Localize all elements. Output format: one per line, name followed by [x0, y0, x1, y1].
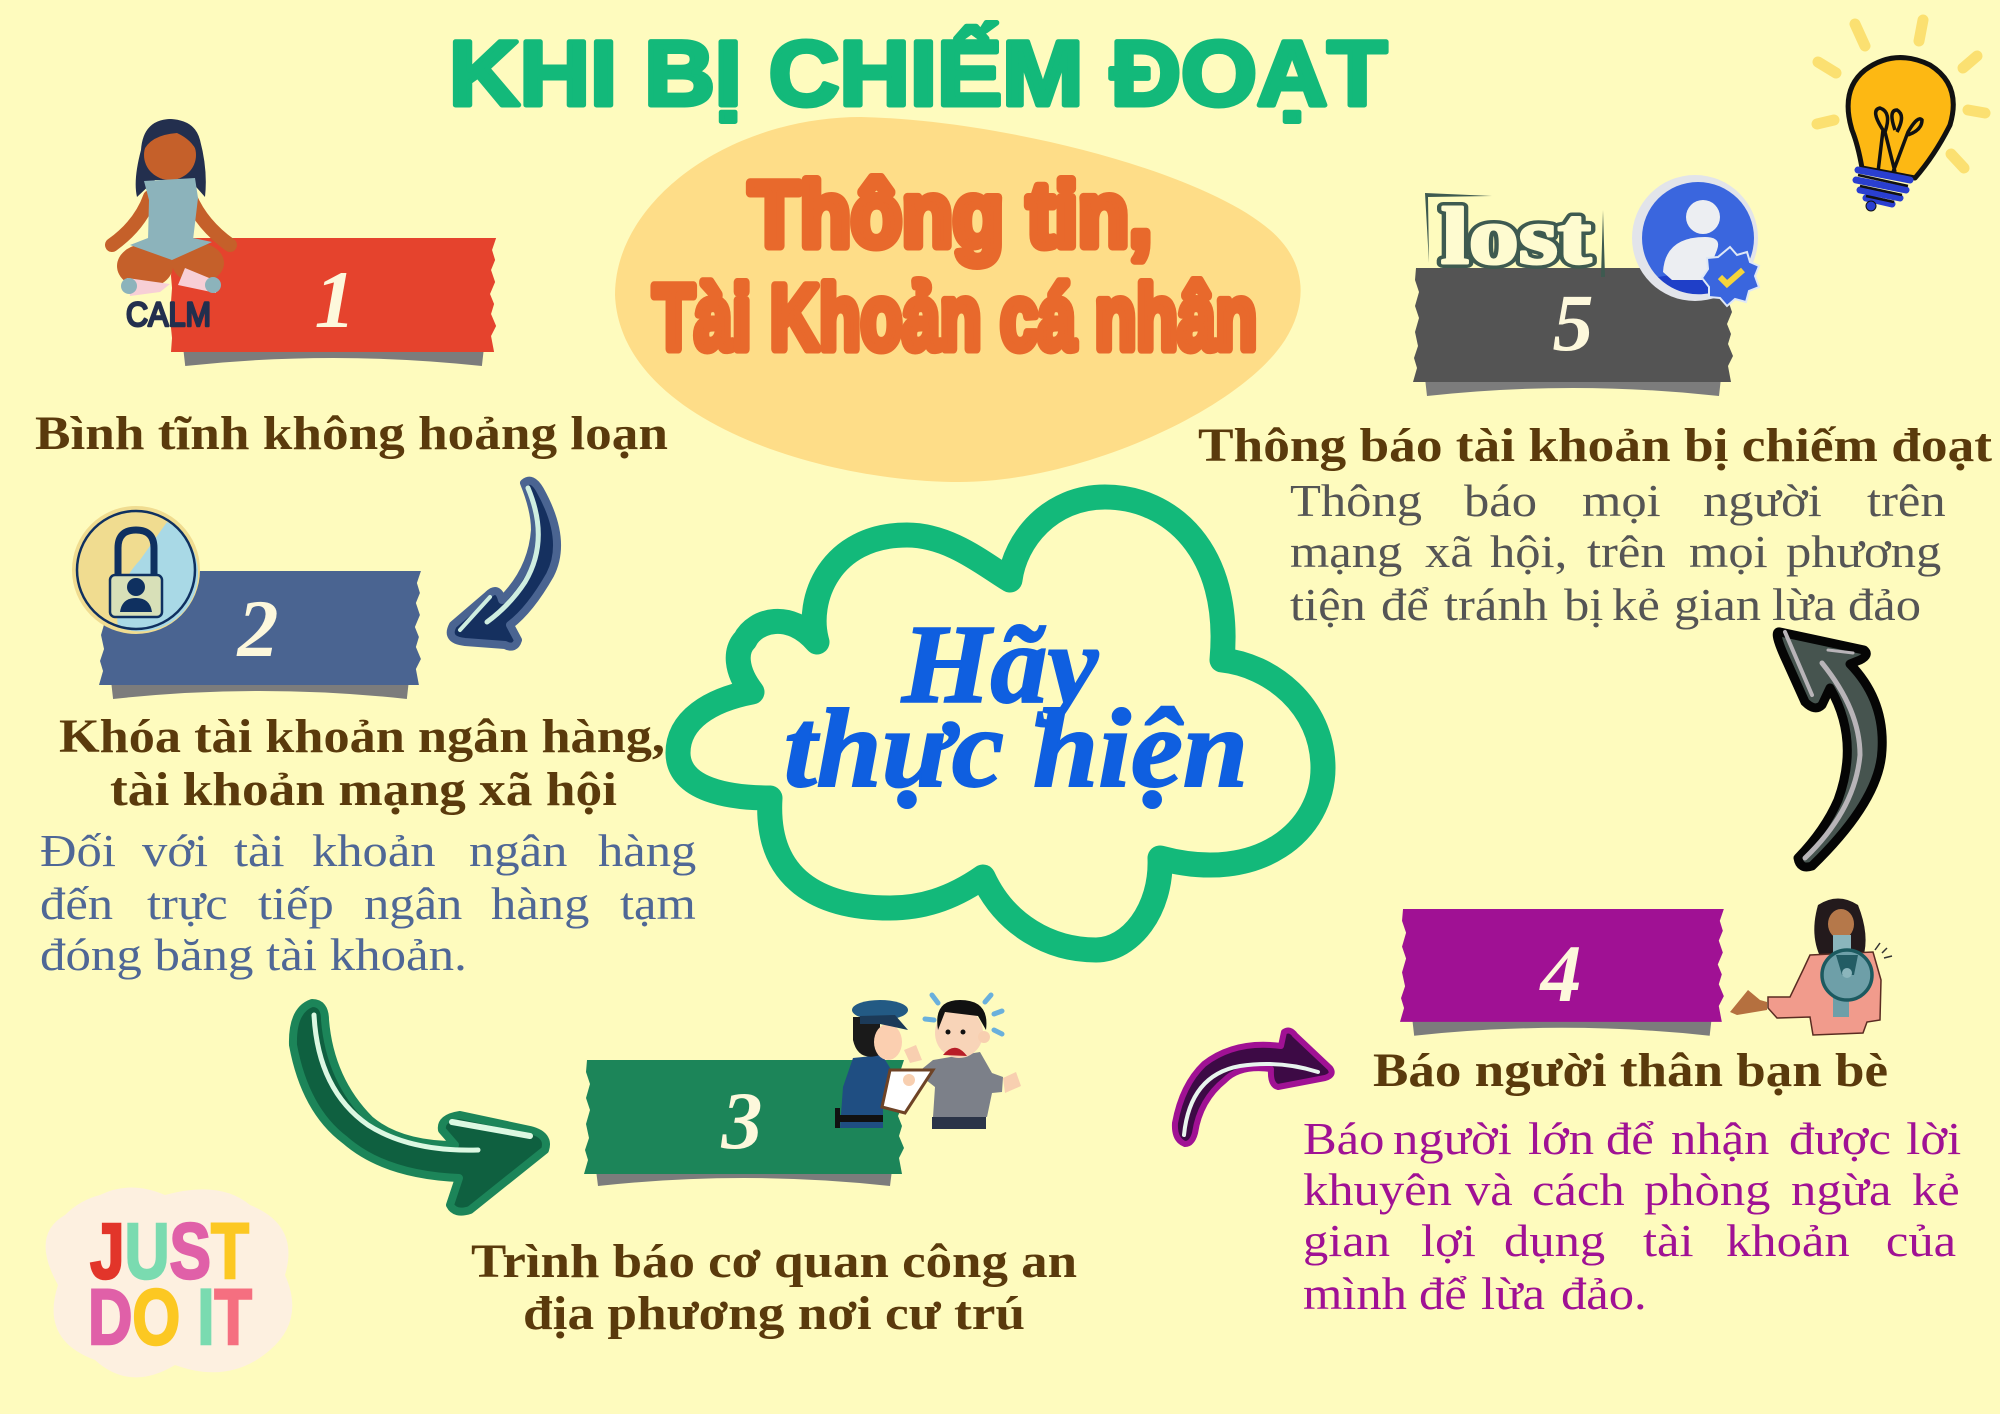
step 4 body text: lợi: [1421, 1216, 1488, 1266]
step 5 body text: trên: [1587, 527, 1678, 577]
step 5 body text: báo: [1464, 476, 1550, 526]
step 4 body text: được: [1789, 1114, 1904, 1164]
sticker: just do it: [46, 1188, 292, 1377]
step 2 body text: hàng: [598, 826, 696, 876]
arrow: step 4 to step 5: [1777, 632, 1882, 867]
step 4 body text: tài: [1643, 1216, 1706, 1266]
subtitle blob panel: Thông tin,: [749, 164, 1152, 266]
sticker: just do it: DO IT: [88, 1272, 252, 1361]
step 2 body text: tạm: [620, 879, 696, 929]
step 4 body text: mình: [1303, 1269, 1420, 1319]
title: KHI BỊ CHIẾM ĐOẠT: [449, 22, 1387, 125]
step 5 body text: tiện: [1290, 580, 1378, 630]
step 1 ribbon: 1: [314, 254, 356, 345]
step 3 ribbon: 3: [720, 1075, 762, 1166]
icon: lost stamp: [1425, 193, 1605, 281]
step 2 body text: Đối: [40, 826, 129, 876]
step 4 body text: lời: [1906, 1114, 1961, 1164]
icon: verified user badge: [1632, 175, 1759, 306]
icon: meditating girl, calm: [112, 119, 230, 334]
step 4 body text: [1303, 1114, 1961, 1319]
arrow: step 2 to step 3: [293, 1003, 546, 1212]
icon: light bulb: [1817, 20, 1985, 211]
step 5 body text: [1290, 476, 1946, 630]
step 5 body text: phương: [1786, 527, 1941, 577]
icon: account lock badge: [72, 506, 200, 634]
step 5 ribbon: [1413, 268, 1733, 396]
step 2 body text: khoản: [312, 826, 448, 876]
step 4 body text: khuyên: [1303, 1165, 1465, 1215]
step 4 body text: người: [1393, 1114, 1525, 1164]
step 2 heading: [59, 710, 665, 816]
icon: lost stamp: lost: [1441, 193, 1591, 281]
cloud with call to action: thực hiện: [784, 687, 1248, 811]
step 2 body text: hàng: [491, 879, 602, 929]
step 4 body text: gian: [1303, 1216, 1403, 1266]
step 4 body text: đảo.: [1561, 1269, 1647, 1319]
step 3 heading: Trình báo cơ quan công an: [471, 1235, 1077, 1288]
step 3 heading: [471, 1235, 1077, 1340]
step 2 ribbon: [99, 571, 421, 699]
step 4 body text: để: [1419, 1269, 1479, 1319]
step 2 ribbon: 2: [236, 583, 278, 674]
step 5 body text: bị: [1564, 580, 1616, 630]
step 4 ribbon: [1400, 909, 1724, 1036]
step 4 body text: nhận: [1671, 1114, 1782, 1164]
step 2 body text: [40, 826, 696, 980]
step 4 body text: lừa: [1481, 1269, 1558, 1319]
sticker: just do it: JUST: [90, 1206, 249, 1295]
arrow: step 1 to step 2: [451, 481, 557, 647]
step 2 body text: tiếp: [258, 879, 346, 929]
step 2 body text: với: [142, 826, 221, 876]
step 5 body text: xã: [1425, 527, 1485, 577]
step 5 ribbon: 5: [1552, 277, 1594, 368]
step 5 body text: Thông: [1290, 476, 1435, 526]
step 4 body text: dụng: [1504, 1216, 1618, 1266]
step 2 body text: ngân: [364, 879, 475, 929]
step 5 body text: mọi: [1582, 476, 1673, 526]
arrow: step 3 to step 4: [1175, 1031, 1332, 1144]
subtitle blob panel: Tài Khoản cá nhân: [653, 267, 1257, 369]
step 4 body text: khoản: [1726, 1216, 1862, 1266]
step 4 body text: cách: [1532, 1165, 1637, 1215]
step 4 body text: lớn: [1528, 1114, 1607, 1164]
step 5 body text: hội,: [1490, 527, 1580, 577]
icon: police officer and citizen: [835, 995, 1021, 1129]
step 1 heading: Bình tĩnh không hoảng loạn: [35, 407, 668, 460]
step 3 heading: địa phương nơi cư trú: [523, 1287, 1025, 1340]
step 4 body text: ngừa: [1791, 1165, 1904, 1215]
step 5 body text: người: [1703, 476, 1834, 526]
step 1 ribbon: [171, 238, 496, 366]
step 5 body text: để: [1381, 580, 1441, 630]
step 5 body text: kẻ: [1612, 580, 1672, 630]
step 3 ribbon: [584, 1060, 904, 1186]
step 5 body text: lừa: [1772, 580, 1849, 630]
step 2 body text: đến: [40, 879, 126, 929]
step 5 body text: đảo: [1848, 580, 1921, 630]
step 5 heading: Thông báo tài khoản bị chiếm đoạt: [1198, 419, 1992, 472]
step 5 body text: mạng: [1290, 527, 1415, 577]
step 4 body text: và: [1465, 1165, 1525, 1215]
step 4 body text: phòng: [1644, 1165, 1783, 1215]
step 4 body text: của: [1886, 1216, 1956, 1266]
step 4 body text: Báo: [1303, 1114, 1397, 1164]
step 4 body text: kẻ: [1912, 1165, 1960, 1215]
step 2 body text: đóng băng tài khoản.: [40, 930, 467, 980]
step 5 body text: tránh: [1444, 580, 1561, 630]
step 4 heading: Báo người thân bạn bè: [1373, 1044, 1888, 1097]
icon: meditating girl, calm: CALM: [126, 296, 211, 334]
step 2 heading: tài khoản mạng xã hội: [110, 763, 617, 816]
cloud with call to action: Hãy: [901, 603, 1099, 727]
step 5 body text: mọi: [1689, 527, 1780, 577]
step 2 body text: ngân: [469, 826, 580, 876]
icon: lost stamp: lost: [1441, 193, 1591, 281]
step 2 body text: tài: [234, 826, 297, 876]
step 4 body text: để: [1606, 1114, 1666, 1164]
subtitle blob panel: [615, 117, 1301, 482]
step 4 ribbon: 4: [1538, 928, 1582, 1019]
cloud with call to action: [678, 497, 1323, 950]
step 5 body text: trên: [1867, 476, 1946, 526]
step 5 body text: gian: [1674, 580, 1774, 630]
step 2 heading: Khóa tài khoản ngân hàng,: [59, 710, 665, 763]
step 2 body text: trực: [147, 879, 240, 929]
icon: woman with megaphone: [1730, 898, 1892, 1035]
